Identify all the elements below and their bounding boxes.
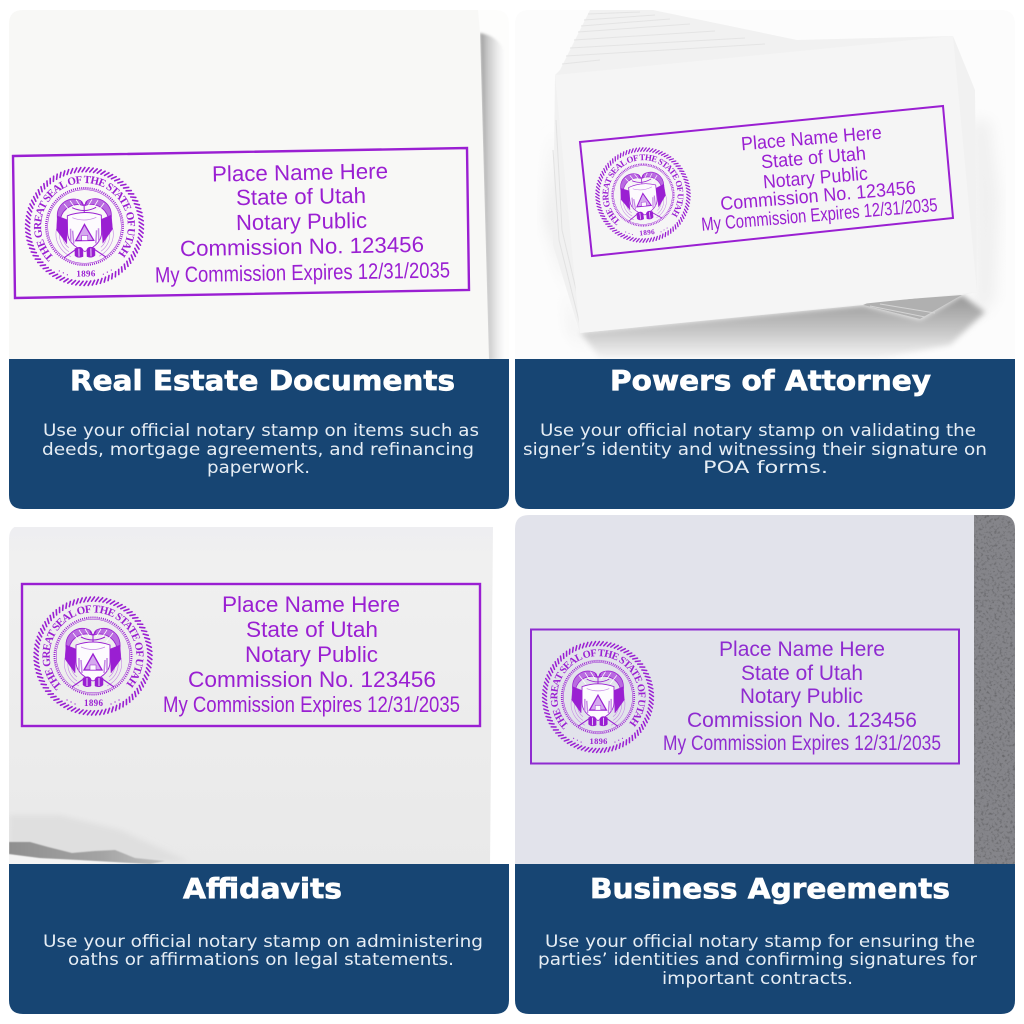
panel: powers of attorney [515, 10, 1015, 509]
seal of Utah: 1896 [590, 736, 607, 746]
description: deeds, mortgage agreements, and refinancing [42, 440, 474, 460]
panel: affidavits [9, 527, 509, 1014]
stamp: place name here: My Commission Expires 12/31/2035 [155, 257, 450, 288]
heading: Business Agreements [590, 872, 950, 905]
seal of Utah [33, 596, 153, 716]
stamp: place name here [576, 286, 914, 325]
caption panel: business agreements [515, 864, 1015, 1014]
stamp: place name here: Commission No. 123456 [188, 667, 436, 692]
photo: torn paper with stamp impression [9, 527, 493, 864]
description: Use your official notary stamp on validating the [540, 421, 976, 441]
heading: Real Estate Documents [70, 364, 455, 397]
stamp: place name here: Commission No. 123456 [687, 709, 917, 732]
photo: stack of cards with stamp impression: My Commission Expires 12/31/2035 [700, 195, 938, 236]
seal of Utah: 1896 [76, 268, 96, 279]
heading: Affidavits [183, 872, 342, 905]
seal of Utah [24, 166, 144, 286]
stamp: place name here: Notary Public [245, 642, 378, 667]
stamp: place name here [530, 628, 960, 764]
photo: stack of cards with stamp impression: State of Utah [760, 144, 867, 173]
photo: stack of cards with stamp impression: Place Name Here [740, 123, 883, 155]
seal of Utah [595, 147, 691, 243]
stamp: place name here: Place Name Here [212, 158, 388, 187]
seal of Utah: 1896 [639, 228, 655, 237]
stamp: place name here: Notary Public [740, 685, 863, 708]
photo: stack of cards with stamp impression: Notary Public [762, 164, 869, 193]
description: important contracts. [662, 969, 853, 989]
description [538, 932, 977, 989]
stamp: place name here: Place Name Here [719, 638, 885, 661]
description: signer’s identity and witnessing their signature on [523, 440, 987, 460]
photo: stack of cards with stamp impression: Commission No. 123456 [720, 178, 917, 215]
seal of Utah: THE GREAT SEAL OF THE STATE OF UTAH [42, 605, 144, 691]
seal of Utah: THE GREAT SEAL OF THE STATE OF UTAH [34, 176, 136, 262]
heading: Powers of Attorney [610, 364, 931, 397]
stamp: place name here: State of Utah [236, 183, 366, 210]
description: Use your official notary stamp on administering [43, 932, 483, 952]
stamp: place name here: State of Utah [741, 662, 863, 685]
caption panel: real estate documents [9, 359, 509, 509]
seal of Utah: THE GREAT SEAL OF THE STATE OF UTAH [550, 649, 646, 730]
seal of Utah: THE GREAT SEAL OF THE STATE OF UTAH [602, 154, 684, 226]
stamp: place name here: My Commission Expires 12/31/2035 [163, 692, 460, 717]
description: parties’ identities and confirming signatures for [538, 950, 977, 970]
stamp: place name here: Commission No. 123456 [180, 232, 424, 261]
seal of Utah: 1896 [84, 698, 104, 708]
description: oaths or affirmations on legal statements. [68, 950, 454, 970]
caption panel: powers of attorney [515, 359, 1015, 509]
description [42, 421, 479, 478]
panel: real estate documents [9, 10, 509, 509]
panel: business agreements [515, 515, 1015, 1014]
caption panel: affidavits [9, 864, 509, 1014]
description: paperwork. [207, 458, 310, 478]
stamp: place name here [12, 146, 470, 300]
stamp: place name here: Place Name Here [222, 592, 400, 617]
stamp: place name here: My Commission Expires 12/31/2035 [663, 732, 941, 755]
stamp: place name here: State of Utah [246, 617, 378, 642]
photo: paper with stamp impression [9, 10, 502, 359]
seal of Utah [542, 640, 654, 754]
concrete edge [974, 515, 1015, 865]
description [523, 421, 987, 478]
description: POA forms. [703, 458, 828, 478]
photo: stack of cards with stamp impression [542, 10, 1001, 358]
description [43, 932, 483, 970]
stamp: place name here [20, 582, 482, 728]
photo: lavender paper with stamp impression [515, 515, 1015, 864]
stamp: place name here: Notary Public [236, 208, 367, 235]
description: Use your official notary stamp on items such as [43, 421, 479, 441]
description: Use your official notary stamp for ensuring the [545, 932, 975, 952]
